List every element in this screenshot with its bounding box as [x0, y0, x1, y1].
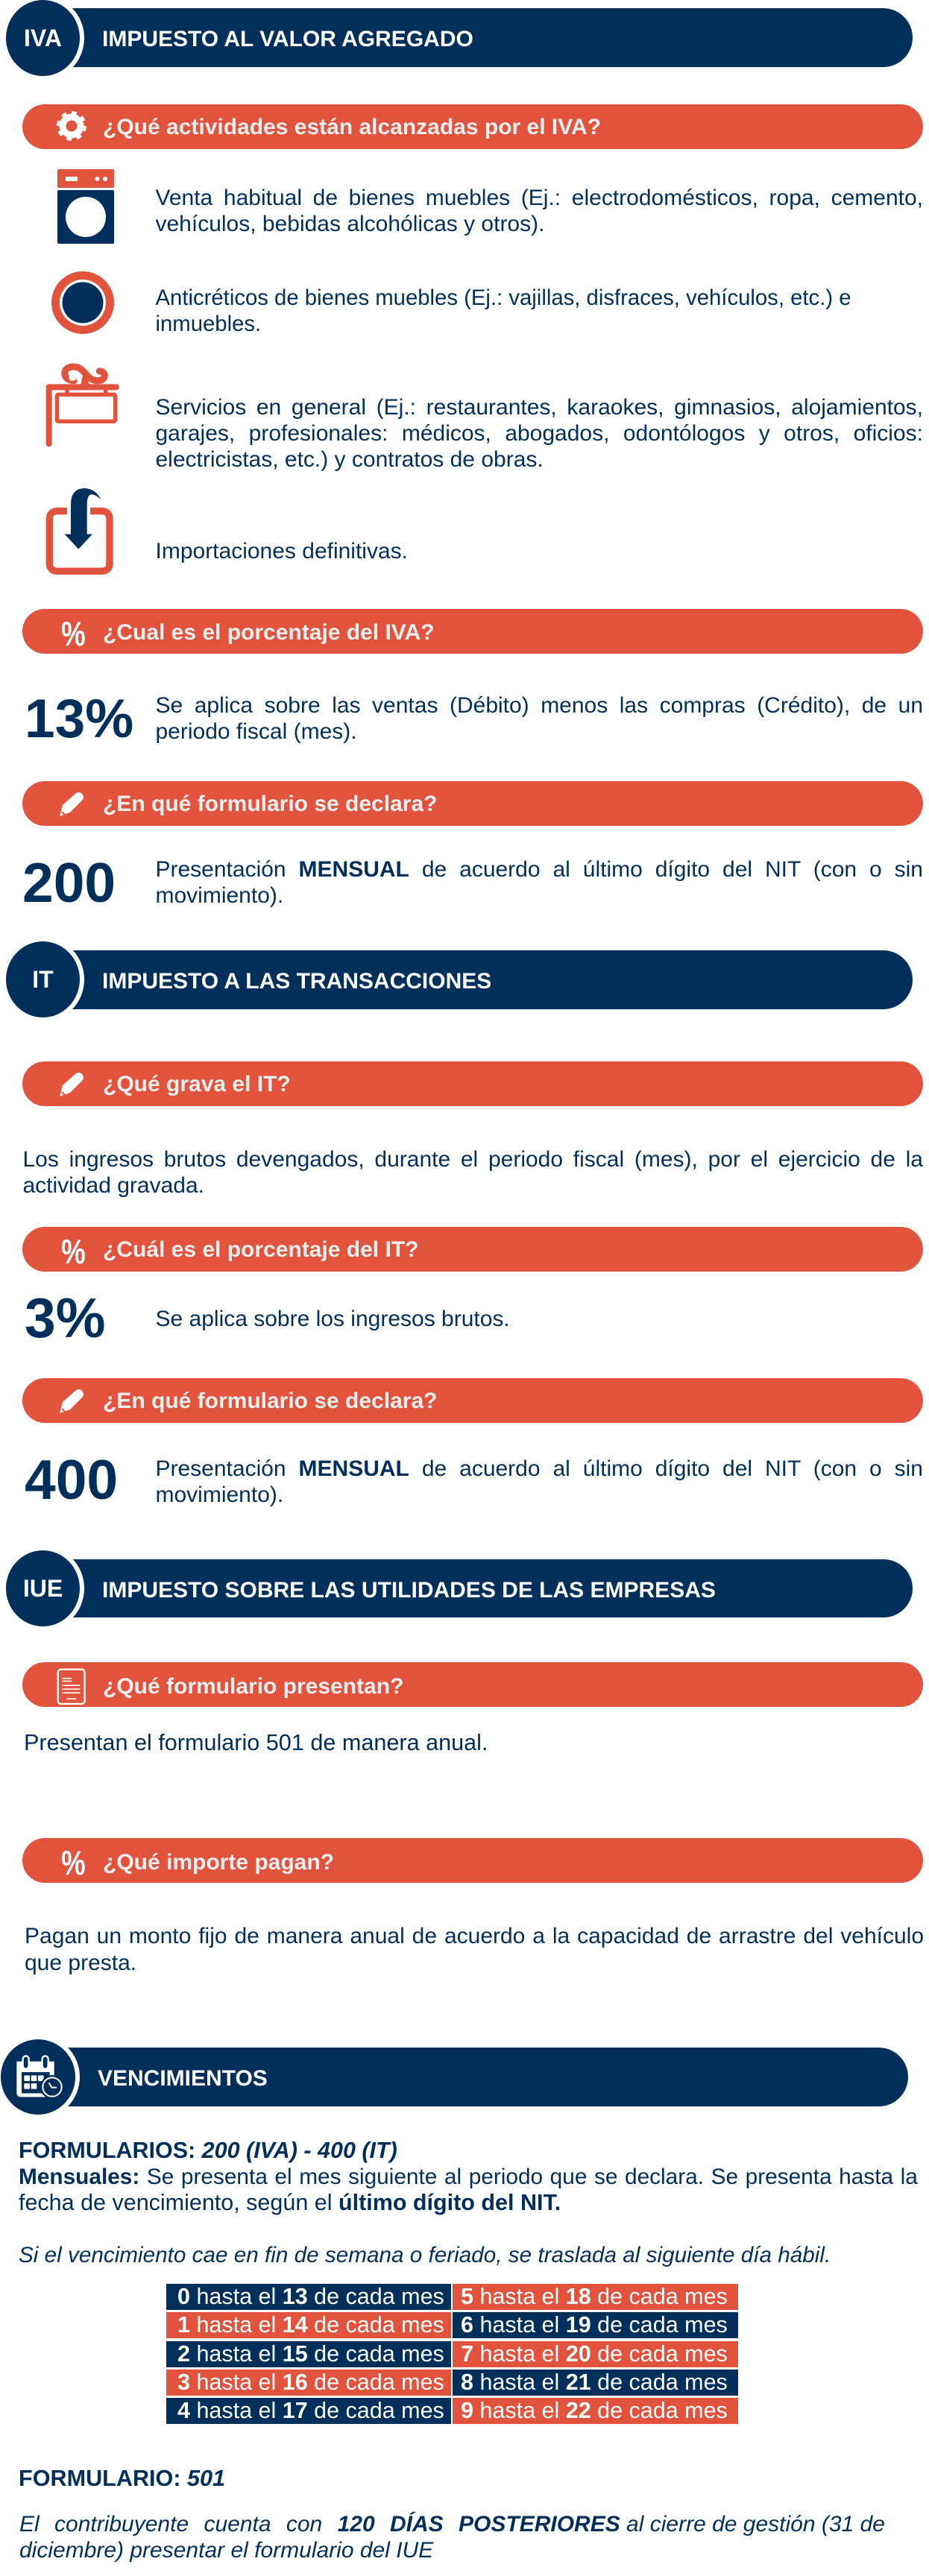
heading text: ¿En qué formulario se declara?: [103, 792, 437, 816]
text: nota feriado: Si el vencimiento cae en fin de semana o feriado, se traslada al siguiente día hábil.: [19, 2243, 831, 2267]
heading pill: porcentaje IVA: [22, 609, 923, 654]
text: anticréticos: [155, 285, 851, 336]
heading pill: actividades alcanzadas: [22, 104, 923, 149]
icon: pencil: [60, 1389, 84, 1413]
icon: shop sign: [46, 364, 119, 447]
row 4 right: 9 hasta el 22 de cada mes: [461, 2398, 728, 2423]
heading pill: porcentaje IT: [22, 1227, 923, 1272]
badge: IT: IT: [32, 966, 54, 993]
heading pill: formulario IT: [22, 1378, 923, 1423]
text: 120 días posteriores: diciembre) presentar el formulario del IUE: [19, 2537, 433, 2563]
badge: IVA: IVA: [24, 25, 62, 51]
text: 200 description: Presentación MENSUAL de acuerdo al último dígito del NIT (con o sin movimiento).: [155, 857, 923, 908]
text: 3% description: Se aplica sobre los ingresos brutos.: [155, 1307, 510, 1331]
row 0 left: 0 hasta el 13 de cada mes: [177, 2284, 444, 2309]
icon: document: [57, 1668, 86, 1705]
icon: ring: [51, 271, 114, 334]
text: anticréticos: Anticréticos de bienes muebles (Ej.: vajillas, disfraces, vehículos, etc.) e: [155, 285, 851, 310]
text: ingresos brutos: Los ingresos brutos devengados, durante el periodo fiscal (mes), por el ejercicio de la actividad gravada.: [22, 1147, 923, 1198]
banner: Impuesto a las transacciones: [67, 950, 913, 1009]
panel: IT section: [6, 941, 923, 1511]
number: 200: 200: [22, 851, 116, 914]
text: venta habitual: Venta habitual de bienes muebles (Ej.: electrodomésticos, ropa, cemento, vehículos, bebidas alcohólicas y otros).: [155, 186, 923, 236]
text: formulario 501: Presentan el formulario 501 de manera anual.: [24, 1730, 488, 1755]
text: formulario 501 heading: FORMULARIO: 501: [19, 2466, 225, 2491]
banner: Impuesto al valor agregado: IMPUESTO AL VALOR AGREGADO: [102, 27, 473, 51]
number: 3%: 3%: [25, 1287, 105, 1349]
icon: percent: %: [61, 1843, 86, 1882]
badge: calendar icon: [1, 2039, 75, 2115]
row 2 right: 7 hasta el 20 de cada mes: [461, 2341, 728, 2367]
text: mensuales: Mensuales: Se presenta el mes siguiente al periodo que se declara. Se presenta hasta la: [19, 2165, 918, 2189]
text: 13% description: Se aplica sobre las ventas (Débito) menos las compras (Crédito), de un periodo fiscal (mes).: [155, 693, 923, 744]
icon: washing machine: [57, 169, 114, 244]
badge: IT: [6, 941, 80, 1017]
icon: calendar with clock: [16, 2055, 63, 2097]
text: mensuales: [19, 2165, 918, 2215]
icon: gear: [57, 111, 86, 141]
icon: pencil: [60, 1073, 84, 1096]
heading text: ¿Cual es el porcentaje del IVA?: [103, 620, 435, 645]
row 3 right: 8 hasta el 21 de cada mes: [461, 2370, 728, 2395]
text: mensuales: fecha de vencimiento, según el último dígito del NIT.: [19, 2190, 561, 2215]
icon: percent: %: [61, 614, 86, 653]
heading pill: qué importe: [22, 1838, 923, 1883]
banner: vencimientos: VENCIMIENTOS: [98, 2066, 268, 2091]
heading text: ¿En qué formulario se declara?: [103, 1389, 437, 1413]
panel: IVA section: [6, 0, 923, 914]
text: 400 description: Presentación MENSUAL de acuerdo al último dígito del NIT (con o sin movimiento).: [155, 1456, 923, 1507]
text: formularios 200 y 400: FORMULARIOS: 200 (IVA) - 400 (IT): [19, 2138, 397, 2163]
banner: Impuesto sobre las utilidades: IMPUESTO SOBRE LAS UTILIDADES DE LAS EMPRESAS: [102, 1578, 716, 1603]
icon: import arrow into box: [46, 488, 113, 575]
text: 120 días posteriores: [19, 2512, 885, 2563]
row 2 left: 2 hasta el 15 de cada mes: [177, 2341, 444, 2367]
row 1 left: 1 hasta el 14 de cada mes: [177, 2312, 444, 2337]
banner: Impuesto a las transacciones: IMPUESTO A LAS TRANSACCIONES: [102, 969, 491, 994]
heading text: ¿Qué actividades están alcanzadas por el IVA?: [103, 115, 601, 139]
heading text: ¿Qué importe pagan?: [103, 1850, 334, 1875]
heading text: ¿Qué grava el IT?: [103, 1072, 291, 1096]
text: monto fijo: Pagan un monto fijo de manera anual de acuerdo a la capacidad de arrastre del vehículo que presta.: [25, 1924, 924, 1975]
heading pill: qué formulario: [22, 1662, 923, 1707]
heading pill: qué grava: [22, 1061, 923, 1106]
banner: Impuesto al valor agregado: [67, 8, 913, 67]
number: 13%: 13%: [25, 689, 133, 749]
panel: vencimientos section: [1, 2039, 918, 2563]
text: servicios: Servicios en general (Ej.: restaurantes, karaokes, gimnasios, alojamientos, garajes, profesionales: médicos, abogados, odontólogos y otros, oficios: electricistas, etc.) y contratos de obras.: [155, 395, 923, 472]
text: importaciones: Importaciones definitivas.: [155, 539, 408, 564]
row 4 left: 4 hasta el 17 de cada mes: [177, 2398, 444, 2423]
badge: IUE: [6, 1550, 80, 1626]
banner: vencimientos: [66, 2048, 908, 2106]
heading pill: formulario IVA: [22, 781, 923, 826]
icon: pencil: [60, 792, 84, 816]
banner: Impuesto sobre las utilidades: [67, 1559, 913, 1617]
icon: percent: %: [61, 1232, 86, 1271]
heading text: ¿Qué formulario presentan?: [103, 1674, 403, 1699]
badge: IUE: IUE: [23, 1575, 63, 1602]
table: vencimiento por último dígito del NIT: [166, 2284, 738, 2424]
heading text: ¿Cuál es el porcentaje del IT?: [103, 1237, 418, 1262]
badge: IVA: [6, 0, 80, 76]
row 0 right: 5 hasta el 18 de cada mes: [461, 2284, 728, 2309]
row 3 left: 3 hasta el 16 de cada mes: [177, 2370, 444, 2395]
number: 400: 400: [25, 1448, 118, 1511]
row 1 right: 6 hasta el 19 de cada mes: [461, 2312, 728, 2337]
text: 120 días posteriores: El contribuyente cuenta con 120 DÍAS POSTERIORES al cierre de gestión (31 de: [19, 2512, 885, 2536]
panel: IUE section: [6, 1550, 924, 1975]
text: anticréticos: inmuebles.: [155, 312, 261, 336]
